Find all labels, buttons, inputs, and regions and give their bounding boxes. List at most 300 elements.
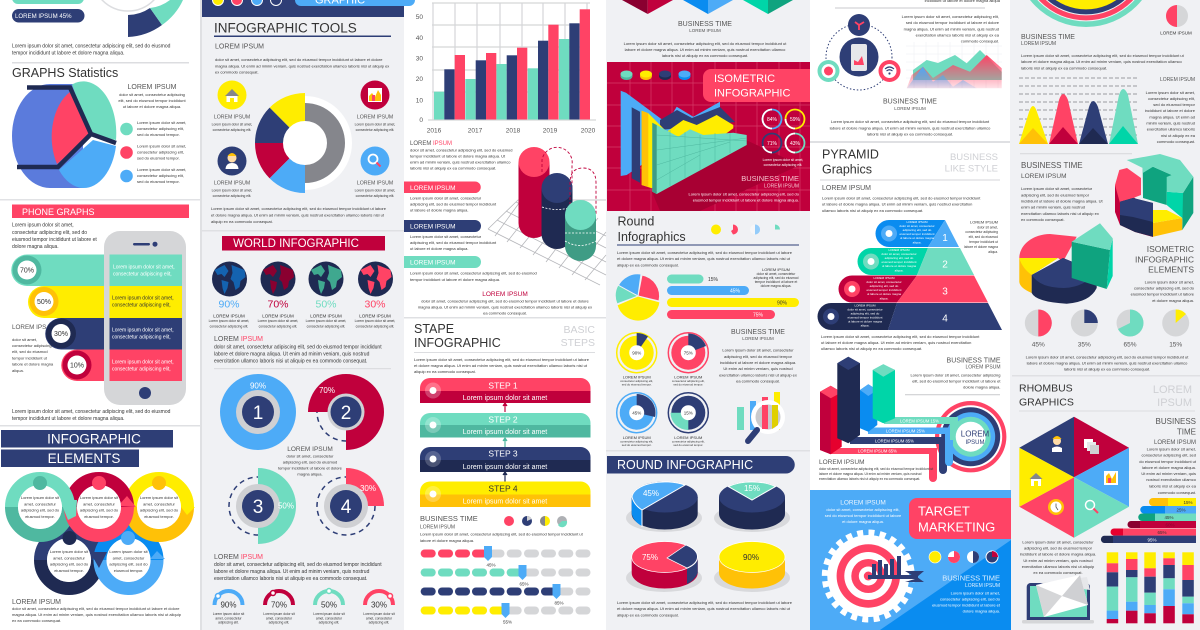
step 3: Lorem ipsum dolor sit amet — [463, 464, 547, 471]
text: Lorem ipsum dolor sit amet, consectetur adipiscing elit, sed do eiusmod tempor incididunt ut labore — [414, 357, 590, 362]
copy: LOREM IPSUM — [840, 500, 886, 506]
caption: LOREM IPSUM — [819, 459, 865, 466]
arrow 3 — [503, 472, 507, 482]
ring chart 45 — [617, 393, 657, 433]
tier 4 — [818, 303, 1002, 330]
heading: INFOGRAPHIC TOOLS — [214, 20, 357, 36]
text: labore et dolore magna aliqua. Ut enim ad minim veniam, quis nostrud exercitation ullamco — [830, 126, 991, 130]
gauge labels: adipiscing elit. — [319, 620, 339, 624]
icon labels: consectetur adipiscing elit. — [356, 194, 394, 198]
progress rows: 85% — [554, 600, 564, 606]
network diagram — [818, 14, 900, 90]
icon labels: consectetur adipiscing elit. — [213, 128, 251, 132]
bar 70% — [11, 254, 182, 286]
ring labels: Lorem ipsum dolor sit — [80, 495, 119, 500]
bar 10%: Lorem ipsum dolor sit amet, — [112, 360, 174, 366]
chart side text — [1145, 77, 1196, 144]
tier captions: eiusmod tempor incididunt — [866, 288, 902, 292]
globe captions: consectetur adipiscing elit. — [210, 324, 248, 328]
business time: LOREM IPSUM — [742, 336, 774, 341]
ribbons and concentric rings: LOREM IPSUM 15% — [900, 418, 939, 424]
text: laboris nisi ut aliquip ex ea commodo consequat. — [867, 132, 953, 136]
heading: ISOMETRIC — [1147, 244, 1194, 254]
footer text: ex ea commodo consequat. — [12, 618, 61, 623]
text: magna aliqua. Ut enim ad minim veniam, quis nostrud — [904, 26, 999, 32]
legend item teal: sed do eiusmod tempor. — [137, 132, 180, 137]
panel: pyramid graphics — [810, 143, 1010, 490]
text: et dolore magna aliqua. Ut enim ad minim veniam, quis nostrud exercitation ullamco laboris nisi ut — [414, 363, 588, 368]
ring dots — [33, 476, 166, 545]
ring labels: eiusmod tempor. — [84, 514, 114, 519]
3D legend pills — [620, 70, 690, 80]
tier 2: 2 — [942, 260, 948, 270]
side heading: LOREM — [1153, 384, 1192, 396]
text: laboris nisi ut aliquip ex ea commodo consequat. — [662, 53, 748, 58]
ring captions: consectetur adipiscing elit, — [672, 379, 705, 383]
subheading: LOREM IPSUM — [214, 336, 263, 343]
tier captions: adipiscing elit, sed do — [885, 256, 914, 260]
3D pie 75%: 75% — [642, 553, 658, 562]
tier 1: 1 — [942, 233, 948, 244]
percentages — [218, 298, 386, 310]
legend heading: LOREM IPSUM — [127, 84, 177, 91]
legend item teal: consectetur adipiscing elit, — [137, 126, 184, 131]
heading: Round — [618, 214, 654, 228]
text: magna aliqua. Ut enim ad minim veniam, quis nostrud exercitation ullamco laboris nisi ut aliquip ex — [215, 64, 389, 68]
heading bar — [607, 456, 795, 474]
chart side text: Lorem ipsum dolor sit amet, — [1146, 90, 1195, 95]
intro text: consectetur adipiscing elit, sed do — [12, 230, 87, 236]
mini pies — [504, 516, 567, 527]
interlocking rings — [12, 479, 188, 588]
heading: LOREM IPSUM — [1021, 173, 1067, 180]
heading bar: WORLD INFOGRAPHIC — [233, 238, 359, 250]
icon labels: LOREM IPSUM — [214, 114, 250, 120]
centre caption: dolor sit amet, consectetur — [287, 454, 334, 458]
caption — [819, 459, 933, 481]
gauges — [214, 588, 393, 605]
ribbons and concentric rings: LOREM IPSUM 65% — [858, 448, 897, 454]
tier captions: LOREM IPSUM — [854, 304, 876, 308]
heading: INFOGRAPHIC — [414, 336, 501, 350]
subheading: LOREM IPSUM — [410, 141, 452, 147]
donut chart — [255, 93, 352, 193]
peak chart — [1019, 78, 1138, 144]
text: labore et dolore magna aliqua. — [420, 538, 474, 543]
stat rings — [762, 110, 804, 152]
step 4 — [420, 481, 590, 507]
heading: ELEMENTS — [1148, 264, 1194, 274]
pie values: 65% — [1123, 342, 1137, 348]
progress rows — [421, 546, 590, 624]
text: Lorem ipsum dolor sit amet, consectetur adipiscing elit, — [902, 14, 999, 19]
bar 30% — [45, 318, 182, 350]
text: dolore magna aliqua. — [963, 608, 1000, 614]
ring labels: adipiscing elit, sed do — [80, 508, 119, 512]
side label: LOREM IPSUM — [1154, 440, 1196, 446]
ring labels: amet, consectetur — [24, 502, 57, 506]
text: incididunt ut labore et dolore magna aliqua. — [1020, 552, 1096, 556]
ring centres — [18, 485, 181, 582]
text: ea commodo consequat. — [483, 310, 527, 316]
heading: BUSINESS TIME — [1021, 161, 1083, 170]
centre caption: adipiscing elit, sed do eiusmod — [283, 460, 337, 464]
ring labels: eiusmod tempor. — [54, 568, 84, 573]
text: dolor sit amet, consectetur adipiscing elit, sed do eiusmod tempor incididunt — [214, 562, 382, 568]
3D pie 15%: 15% — [744, 484, 760, 493]
text: incididunt ut labore et dolore magna aliqua. Ut — [1021, 198, 1103, 204]
bar chart: 0 — [419, 117, 423, 124]
panel: target marketing — [810, 490, 1011, 630]
3D pie 90%: 90% — [743, 553, 759, 562]
heading: GRAPHICS — [1019, 396, 1074, 408]
gauge labels: 30% — [371, 600, 387, 610]
tier captions: aliqua. — [895, 268, 904, 272]
tier captions: adipiscing elit, sed do — [870, 284, 899, 288]
business time: BUSINESS TIME — [420, 514, 478, 523]
arrow with bars — [868, 556, 924, 582]
copy: dolor sit amet, consectetur adipiscing elit, — [826, 507, 900, 512]
tier captions: adipiscing elit, sed do — [851, 312, 880, 316]
pyramid side text — [964, 220, 998, 254]
3D pie 15% — [714, 482, 790, 532]
chart side text: commodo consequat. — [1157, 139, 1195, 144]
ring chart 15 — [668, 393, 708, 433]
icon labels: LOREM IPSUM — [214, 180, 250, 186]
3D pie 45%: 45% — [643, 489, 659, 498]
bar 10% — [61, 350, 182, 381]
tier captions: dolor sit amet, consectetur — [847, 308, 883, 312]
panel: infographic tools — [202, 0, 415, 224]
icon: chart — [360, 80, 390, 110]
side text: dolor sit amet, — [12, 337, 37, 342]
gauge labels: amet, consectetur — [215, 616, 242, 620]
bar 50%: 50% — [37, 299, 51, 306]
text: Lorem ipsum dolor sit amet, consectetur — [410, 234, 482, 239]
heading — [883, 98, 937, 111]
legend copy: elit, sed do eiusmod tempor incididunt — [118, 98, 186, 103]
label pill 45% — [12, 9, 84, 22]
side text: commodo consequat. — [1158, 490, 1196, 495]
intro text: eiusmod tempor incididunt ut labore et — [12, 237, 97, 243]
side text: aliqua. — [12, 368, 24, 373]
icon: home — [1030, 473, 1042, 486]
mini pies — [711, 224, 780, 234]
bar 30%: Lorem ipsum dolor sit amet, — [112, 328, 174, 334]
centre caption: magna aliqua. — [297, 472, 323, 476]
ribbons and concentric rings — [831, 401, 1006, 482]
globe captions: Lorem ipsum dolor sit amet, — [209, 319, 249, 323]
round stat 1: 90% — [250, 382, 266, 390]
title banner — [1, 430, 173, 467]
tier captions: ut labore et dolore magna — [900, 236, 934, 240]
icon labels: LOREM IPSUM — [357, 180, 393, 186]
business time: LOREM IPSUM — [965, 364, 1000, 370]
text: exercitation ullamco laboris nisi ut aliquip ex ea commodo consequat. — [214, 358, 367, 364]
subheading: LOREM IPSUM — [215, 44, 264, 50]
side text: Lorem ipsum dolor sit amet, — [1147, 446, 1196, 452]
text: exercitation ullamco laboris nisi ut aliquip ex — [719, 372, 797, 378]
progress pills: 15% — [708, 277, 719, 283]
side text: Ut enim ad minim veniam, quis — [1141, 471, 1196, 476]
bar chart: 40 — [416, 35, 423, 42]
ring captions: sed do eiusmod tempor. — [622, 382, 652, 386]
text: enim ad minim veniam, quis nostrud — [1021, 204, 1085, 210]
step 2 — [420, 413, 590, 438]
horizontal stacked bars: 15% — [1183, 500, 1193, 505]
arc rings — [1014, 0, 1158, 27]
ring captions: consectetur adipiscing elit, — [620, 379, 653, 383]
side text: laboris nisi ut aliquip ex ea — [1149, 484, 1197, 488]
3D pie 75% — [626, 542, 702, 592]
half pie: LOREM IPSUM — [1160, 30, 1192, 36]
stat labels: 43% — [790, 141, 801, 147]
heading: LOREM IPSUM — [689, 28, 721, 33]
panel: column six top — [1014, 0, 1196, 372]
heading bar — [222, 236, 385, 250]
business time — [731, 329, 785, 341]
text: Lorem ipsum dolor sit amet, consectetur adipiscing elit, sed do eiusmod tempor incididunt — [822, 196, 981, 200]
business time: BUSINESS TIME — [741, 174, 799, 183]
side text: consectetur adipiscing — [12, 343, 52, 348]
chart side text: exercitation ullamco laboris — [1147, 126, 1195, 132]
legend copy: dolor sit amet, consectetur adipiscing — [119, 92, 185, 97]
ring captions: sed do eiusmod tempor. — [622, 443, 652, 447]
stat labels — [767, 117, 801, 147]
bar 50%: Lorem ipsum dolor sit amet, — [112, 296, 174, 302]
legend item pink: consectetur adipiscing elit, — [137, 150, 184, 154]
ring labels: eiusmod tempor. — [114, 568, 143, 573]
bar chart: 10 — [416, 98, 423, 104]
text: adipiscing elit, sed do eiusmod tempor — [1024, 546, 1093, 550]
side heading: BUSINESS — [1156, 417, 1196, 426]
bar chart: 20 — [416, 76, 423, 83]
centre caption: tempor incididunt ut labore et dolore — [278, 466, 343, 470]
text: Lorem ipsum dolor sit amet, consectetur — [1022, 540, 1094, 544]
globe captions: consectetur adipiscing elit. — [259, 324, 297, 328]
text: aliquip ex ea commodo consequat. — [617, 612, 679, 618]
step 4: Lorem ipsum dolor sit amet — [463, 498, 547, 506]
heading bar: PHONE GRAPHS — [22, 207, 95, 217]
icon: chart — [1104, 471, 1118, 485]
text: labore et dolore magna aliqua. Ut enim ad minim veniam, quis nostrud exercitation ullamco — [1021, 59, 1183, 64]
pie chart — [615, 274, 660, 321]
text: dolor sit amet, consectetur adipiscing elit, sed do eiusmod tempor incididunt ut labore et dolore — [421, 298, 589, 304]
heading: STAPE — [414, 322, 454, 336]
bar 10%: 10% — [70, 362, 84, 370]
title label: TARGET — [918, 504, 970, 518]
panel: top-left donut — [12, 0, 190, 56]
bar chart: 30 — [416, 56, 423, 62]
tier captions: ut labore et dolore magna — [867, 292, 901, 296]
pie values: 35% — [1078, 342, 1091, 348]
round stat 3 — [229, 468, 296, 544]
bar 30%: 30% — [54, 331, 68, 338]
heading: BUSINESS TIME — [1021, 34, 1075, 41]
text: incididunt ut labore et dolore magna aliqua. — [720, 360, 796, 365]
side heading: LIKE STYLE — [945, 164, 998, 174]
text: et dolore magna aliqua. — [1152, 298, 1194, 303]
text block: Lorem ipsum dolor sit amet, consectetur adipiscing elit, sed do eiusmod — [12, 44, 171, 50]
gauge labels — [213, 600, 395, 624]
text: et dolore magna aliqua. Ut enim ad minim veniam, quis nostrud exercitation ullamco laboris nisi ut — [617, 256, 791, 261]
text: et dolore magna aliqua. Ut enim ad minim veniam, quis nostrud exercitation ullamco laboris nisi ut — [617, 606, 791, 611]
horizontal stacked bars: 25% — [1176, 508, 1186, 512]
gauge labels: amet, consectetur — [266, 616, 293, 620]
bar 70%: Lorem ipsum dolor sit amet, — [113, 264, 175, 270]
business time: LOREM IPSUM — [764, 184, 799, 190]
step 2: STEP 2 — [488, 414, 518, 424]
progress pills: 90% — [777, 300, 788, 306]
bar chart: 2018 — [506, 128, 521, 134]
tier 2 — [858, 248, 974, 275]
tier captions: dolor sit amet, consectetur — [881, 252, 917, 256]
text: eiusmod tempor incididunt ut labore et — [932, 602, 1001, 608]
heading: RHOMBUS — [1019, 382, 1073, 394]
step 1: STEP 1 — [488, 380, 518, 390]
business time: BUSINESS TIME — [731, 329, 785, 336]
text: Lorem ipsum dolor sit amet, consectetur adipiscing elit, sed do — [688, 192, 800, 196]
text: exercitation ullamco laboris nisi ut aliquip — [1022, 564, 1095, 569]
icon: person — [1052, 436, 1062, 452]
ring labels: amet, consectetur — [53, 556, 86, 560]
side text: tempor incididunt ut labore et — [755, 280, 797, 284]
cylinder teal — [565, 200, 596, 261]
copy: et dolore magna aliqua. — [842, 519, 884, 524]
text: Lorem ipsum dolor sit amet, consectetur adipiscing elit, sed do eiusmod tempor incididunt ut labore — [617, 600, 793, 605]
globe captions: consectetur adipiscing elit. — [307, 324, 345, 328]
percentages: 70% — [267, 298, 289, 310]
round stat 4: 30% — [360, 484, 376, 493]
legend item pink: Lorem ipsum dolor sit amet, — [137, 144, 186, 148]
ring captions — [620, 374, 705, 447]
round stat 3: 3 — [253, 497, 263, 518]
heading bar: ROUND INFOGRAPHIC — [617, 458, 753, 472]
ring captions: sed do eiusmod tempor. — [673, 382, 703, 386]
text: labore et dolore magna aliqua. Ut enim ad minim veniam, quis nostrud exercitation ullamco — [1027, 360, 1188, 366]
text: exercitation ullamco laboris nisi ut aliquip ex ea commodo consequat. — [214, 576, 367, 582]
panel: isometric infographic — [607, 62, 810, 211]
heading: INFOGRAPHIC — [1135, 254, 1194, 264]
panel: stape infographic — [414, 322, 595, 624]
footer label: LOREM IPSUM — [12, 599, 61, 606]
text: Lorem ipsum dolor sit amet, consectetur adipiscing elit, sed do eiusmod tempor incididunt ut — [624, 41, 787, 46]
text: adipiscing elit, sed do eiusmod tempor — [724, 354, 793, 359]
text: ullamco laboris nisi ut aliquip ex ea commodo consequat. — [822, 208, 923, 213]
pyramid — [818, 220, 1002, 330]
gauge labels: adipiscing elit. — [218, 620, 239, 624]
side text: dolore magna aliqua. — [761, 284, 791, 288]
area chart — [906, 42, 1002, 88]
side text: nostrud exercitation ullamco — [1146, 477, 1197, 482]
panel: rhombus graphics — [1019, 382, 1197, 624]
ring captions: LOREM IPSUM — [674, 435, 702, 440]
text: ut labore et dolore magna aliqua. — [410, 246, 468, 251]
progress rows: 65% — [519, 582, 529, 586]
panel: round infographic — [607, 456, 795, 618]
gauge labels: 70% — [271, 600, 287, 610]
ribbons and concentric rings: IPSUM — [965, 440, 985, 446]
text: Lorem ipsum dolor sit amet, consectetur adipiscing — [910, 372, 1000, 378]
text: magna aliqua. Ut enim ad minim veniam, quis nostrud exercitation ullamco laboris nisi ut aliquip ex — [418, 304, 592, 310]
text: Lorem ipsum dolor sit amet, consectetur adipiscing elit, sed do eiusmod — [410, 270, 537, 276]
gauge labels: 90% — [220, 600, 237, 610]
globe captions — [209, 314, 395, 328]
globes — [212, 262, 393, 296]
ring labels: Lorem ipsum dolor sit — [50, 549, 89, 554]
panel: round infographics — [615, 214, 799, 447]
gauge labels: adipiscing elit. — [369, 620, 389, 624]
arrow 1 — [503, 403, 507, 412]
bar 70%: consectetur adipiscing elit, — [113, 272, 172, 278]
text: dolore magna aliqua. — [963, 384, 1000, 390]
heading: Graphics — [822, 162, 872, 176]
text: eiusmod tempor incididunt ut labore — [1131, 292, 1195, 296]
text: consectetur adipiscing elit, sed do — [940, 596, 1001, 602]
footer text: aliquip ex ea commodo consequat. — [211, 219, 273, 224]
ring chart 90 — [617, 333, 657, 373]
ring labels: adipiscing elit, sed do — [140, 508, 179, 512]
text: elit, sed do eiusmod tempor incididunt ut labore et — [912, 378, 1001, 384]
ribbons and concentric rings: LOREM — [961, 430, 990, 438]
text: Lorem ipsum dolor sit amet, consectetur — [410, 196, 482, 200]
round stat 1: 1 — [253, 403, 263, 424]
label pill 45%: LOREM IPSUM 45% — [15, 13, 72, 20]
legend item blue: sed do eiusmod tempor. — [137, 179, 180, 184]
legend item blue — [120, 167, 186, 184]
panel: phone graphs — [11, 204, 189, 422]
hexagon tips — [622, 0, 793, 14]
tier captions: aliqua. — [861, 324, 870, 328]
heading bar — [12, 204, 189, 218]
percentages: 90% — [218, 298, 240, 310]
text: Lorem ipsum dolor sit amet, consectetur adipiscing elit, sed do eiusmod tempor incididunt — [831, 119, 990, 124]
chart side text: minim veniam, quis nostrud — [1146, 120, 1195, 126]
chart side text: incididunt ut labore et dolore — [1145, 108, 1196, 113]
panel: bar chart section — [404, 3, 606, 316]
icon: papers — [1084, 439, 1099, 454]
side text: do eiusmod tempor incididunt ut — [1139, 459, 1197, 464]
title label — [703, 69, 810, 102]
progress pills: 75% — [753, 312, 764, 318]
text: dolor sit amet, consectetur adipiscing elit, sed do eiusmod — [410, 148, 512, 152]
heading: PYRAMID — [822, 148, 879, 162]
icon labels: consectetur adipiscing elit. — [356, 128, 394, 132]
hexagon — [1019, 417, 1129, 538]
text: aliquip ex ea commodo consequat. — [617, 262, 679, 268]
ring chart 15: 15% — [684, 410, 693, 416]
text: sed do eiusmod tempor incididunt ut labore et dolore — [906, 20, 1000, 25]
progress rows: 55% — [503, 620, 512, 624]
icon: magnifier — [360, 146, 390, 176]
panel: infographic elements — [1, 430, 195, 623]
percentages: 50% — [315, 298, 337, 310]
gauge labels: Lorem ipsum dolor sit — [263, 612, 295, 616]
text: eiusmod tempor incididunt ut labore et dolore magna aliqua. — [693, 198, 799, 202]
pyramid side text: tempor incididunt ut — [969, 240, 998, 244]
half pie — [1160, 5, 1192, 36]
side text: consectetur adipiscing elit, sed — [1142, 452, 1196, 458]
bar chart: 2017 — [468, 128, 483, 134]
globe captions: Lorem ipsum dolor sit amet, — [355, 319, 395, 323]
globe captions: LOREM IPSUM — [262, 314, 294, 318]
ring captions: LOREM IPSUM — [623, 435, 651, 440]
pyramid side text: aliqua. — [988, 250, 998, 254]
side heading: BUSINESS — [950, 152, 998, 163]
3D donut — [1115, 154, 1193, 237]
ring captions: LOREM IPSUM — [623, 374, 651, 380]
text: tempor incididunt ut labore et dolore magna aliqua. — [410, 277, 500, 282]
